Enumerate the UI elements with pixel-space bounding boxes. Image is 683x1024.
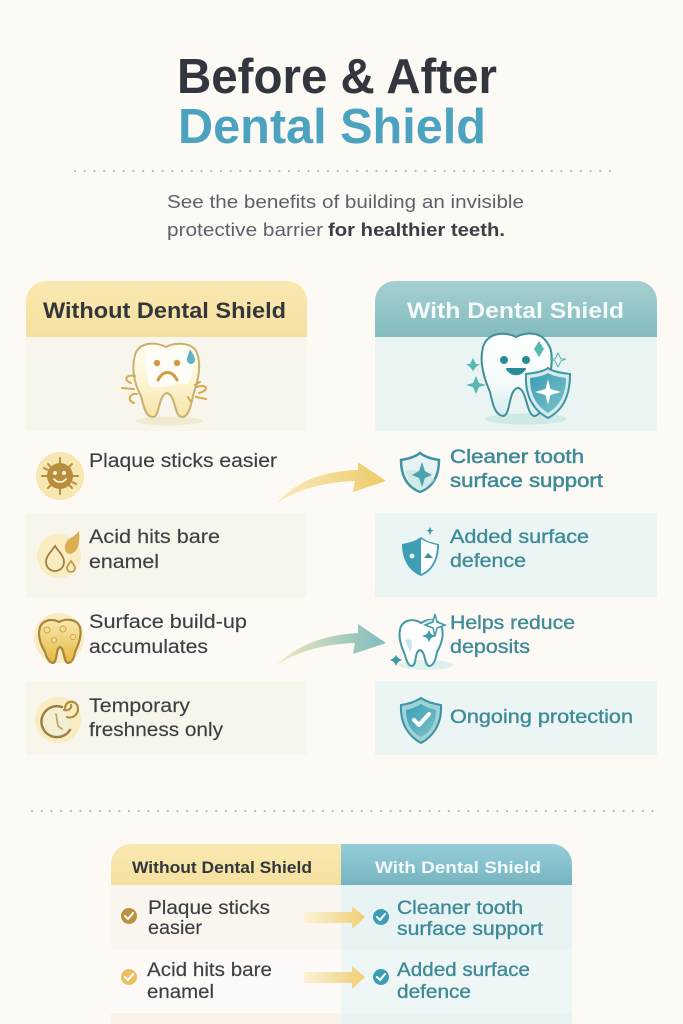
icon: half shield [402,527,439,576]
table row: acid: Acid hits bare [147,960,272,981]
row: ongoing protection [375,681,657,755]
icon: fading clock [35,697,81,743]
subtitle [167,192,524,240]
row: helps reduce deposits [390,613,575,670]
table header: With Dental Shield [375,859,541,877]
row: temporary freshness only: freshness only [89,720,224,741]
row: helps reduce deposits: Helps reduce [450,613,575,634]
table row: acid: defence [397,982,471,1003]
header: without dental shield: Without Dental Shield [43,298,286,323]
header: with dental shield [375,281,657,337]
row: cleaner tooth surface support: Cleaner tooth [450,447,584,468]
table row: plaque [111,885,572,949]
title: Dental Shield [178,100,486,154]
table row: plaque: easier [148,918,203,939]
row: ongoing protection: Ongoing protection [450,707,633,728]
icon: sparkling tooth [390,614,453,670]
row: temporary freshness only [26,681,307,755]
arrow: yellow curved arrow [277,462,386,503]
table row: plaque: Plaque sticks [148,898,270,919]
table row: acid [111,949,572,1013]
row: helps reduce deposits: deposits [450,637,530,658]
arrow: table row two [304,966,365,989]
icon: tooth with build-up [34,613,84,663]
icon: check teal two [373,969,389,985]
table row: plaque: surface support [397,919,544,940]
row: plaque sticks easier: Plaque sticks easier [89,451,278,472]
table row: cut off [111,1013,572,1024]
subtitle: protective barrier [167,220,323,240]
row: plaque sticks easier [36,451,278,500]
icon: sparkle shield [401,453,439,492]
table header [111,844,572,885]
table row: acid: Added surface [397,960,530,981]
row: added surface defence: defence [450,551,526,572]
icon: check gold [121,908,137,924]
header: with dental shield: With Dental Shield [407,298,624,323]
row: acid hits bare enamel [26,513,307,597]
panel: with dental shield [375,281,657,755]
panel: without dental shield [26,281,307,755]
row: cleaner tooth surface support: surface support [450,471,604,492]
title [177,50,497,154]
row: acid hits bare enamel: Acid hits bare [89,527,220,548]
icon: check teal [373,909,389,925]
row: added surface defence: Added surface [450,527,589,548]
row: added surface defence [375,513,657,597]
icon: plaque germ [36,452,84,500]
arrow: table row one [304,906,365,929]
table row: plaque: Cleaner tooth [397,898,523,919]
icon: check shield [401,698,441,743]
illustration: happy tooth with shield [375,334,657,431]
arrow: yellow to teal curved arrow [277,624,386,665]
icon: acid drops [37,531,81,578]
row: surface build-up accumulates: accumulates [89,637,208,658]
header: without dental shield [26,281,307,337]
row: cleaner tooth surface support [401,447,604,492]
table row: acid: enamel [147,982,214,1003]
row: temporary freshness only: Temporary [89,696,191,717]
icon: check amber [121,969,137,985]
table header: Without Dental Shield [132,859,312,877]
illustration: worried tooth [26,337,307,431]
comparison table [111,844,572,1024]
row: acid hits bare enamel: enamel [89,552,159,573]
subtitle: for healthier teeth. [328,220,505,240]
subtitle: See the benefits of building an invisible [167,192,524,212]
row: surface build-up accumulates: Surface build-up [89,612,247,633]
row: surface build-up accumulates [34,612,247,663]
title: Before & After [177,50,497,104]
